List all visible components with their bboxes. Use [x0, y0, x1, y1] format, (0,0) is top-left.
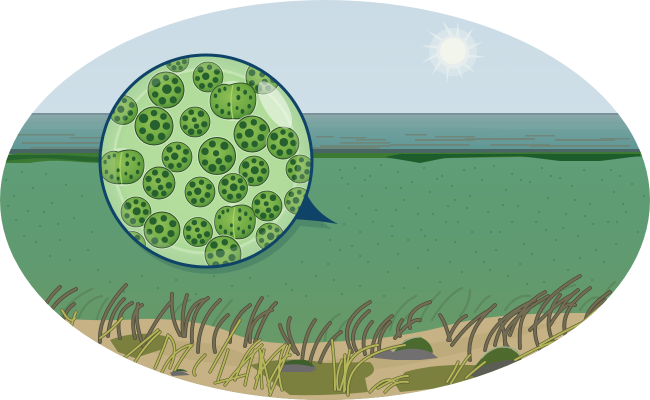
seabed sand: [63, 313, 591, 400]
yellow foreground seagrass: [60, 301, 606, 397]
rock with algae, centre-right: [372, 337, 438, 360]
sand shading bands: [154, 322, 558, 369]
sea surface: [0, 113, 650, 156]
magnifier drop shadow: [104, 176, 332, 274]
sun: [420, 20, 486, 84]
rock with algae, left small: [170, 369, 190, 376]
suspended phytoplankton stipple: [6, 165, 644, 300]
rock with algae, centre-left: [282, 360, 316, 372]
lens glass rim: [108, 63, 304, 259]
underwater column: [0, 154, 650, 400]
algae cells: [102, 58, 310, 266]
brown seagrass: [46, 276, 635, 362]
background seagrass (faint): [60, 282, 615, 342]
lens highlight: [251, 76, 299, 134]
rock with algae, right: [471, 346, 522, 378]
olive algae patches on seabed: [110, 334, 510, 395]
sky: [32, 0, 618, 113]
callout pointer: [292, 192, 338, 224]
lens outline: [100, 55, 312, 267]
magnifier circle: [98, 47, 315, 273]
surface algae mat: [5, 152, 650, 163]
